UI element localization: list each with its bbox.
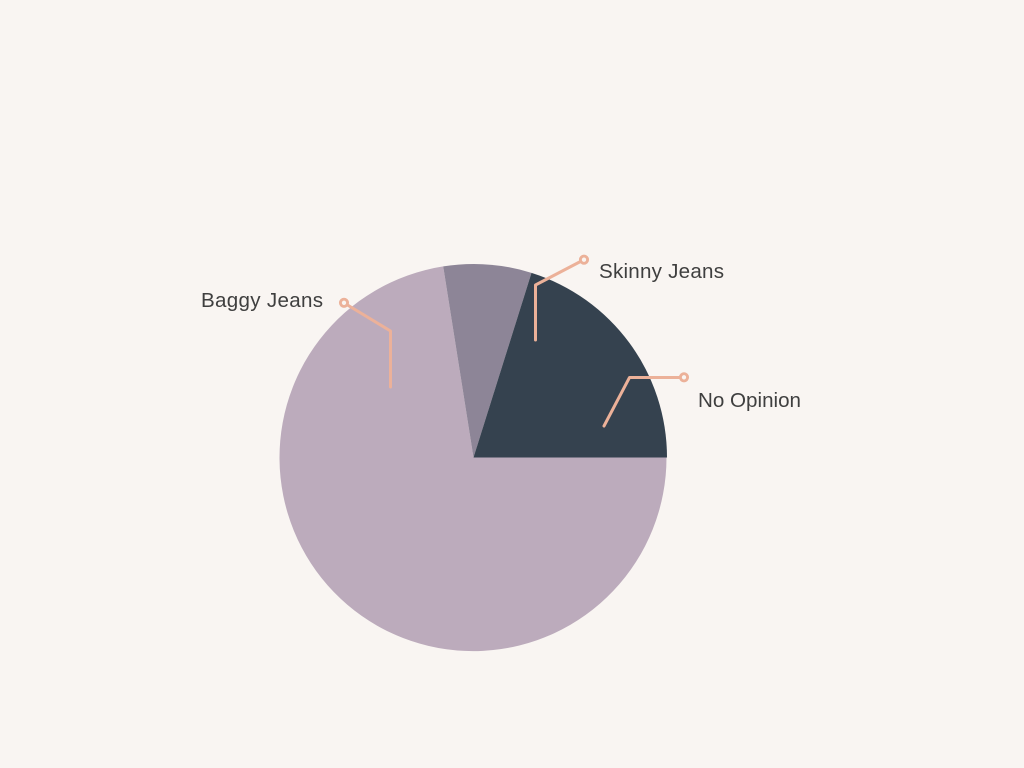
callout: Baggy Jeans (201, 289, 390, 387)
callout: No Opinion (604, 374, 801, 426)
label: Skinny Jeans: Skinny Jeans (599, 260, 724, 283)
leader line: Baggy Jeans (348, 305, 390, 387)
slice: Baggy Jeans (280, 266, 667, 651)
leader dot: No Opinion (680, 374, 688, 381)
label: No Opinion: No Opinion (698, 389, 801, 412)
callout: Skinny Jeans (536, 256, 724, 340)
pie chart (280, 264, 667, 651)
leader line: No Opinion (604, 378, 680, 426)
label: Baggy Jeans: Baggy Jeans (201, 289, 323, 312)
slice: unlabelled grey-purple (443, 264, 532, 458)
slice: Skinny Jeans and No Opinion (474, 273, 667, 458)
leader dot: Skinny Jeans (580, 256, 588, 263)
leader dot: Baggy Jeans (340, 299, 348, 306)
leader line: Skinny Jeans (536, 262, 580, 340)
